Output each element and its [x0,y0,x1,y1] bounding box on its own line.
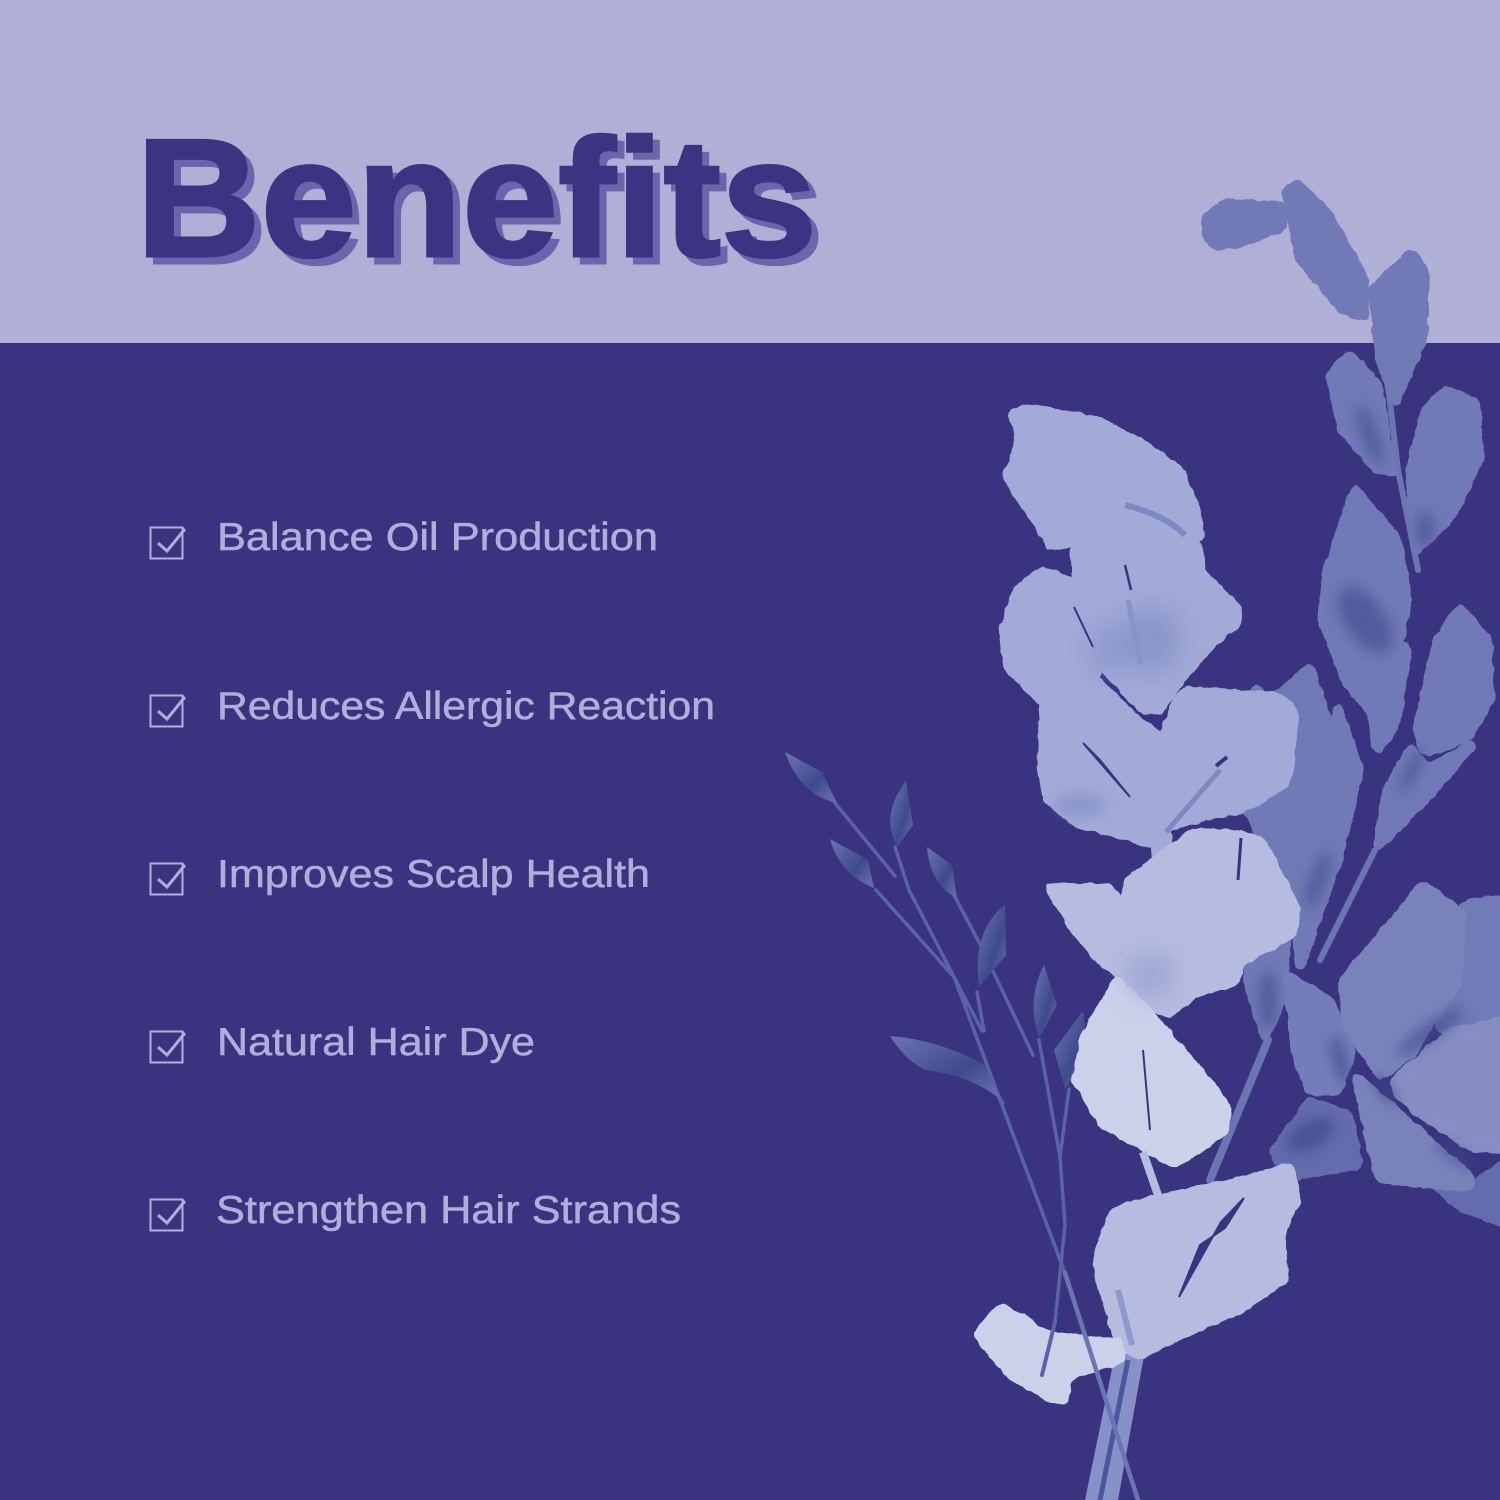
item: Improves Scalp Health: Improves Scalp Health [217,853,650,896]
right branch stems [1210,360,1418,1180]
stems crossing over the leaves [1042,1273,1138,1500]
white leaves [977,980,1228,1399]
right flower front petals [1342,885,1500,1188]
item: Balance Oil Production: Balance Oil Production [217,516,658,559]
item: Natural Hair Dye: Natural Hair Dye [217,1021,535,1064]
branch leaf shading [1259,404,1434,1030]
title: Benefits: Benefits [143,111,824,299]
botanical illustration [785,184,1500,1500]
main panel [0,343,1500,1500]
item: Strengthen Hair Strands: Strengthen Hair Strands [216,1189,681,1232]
title: Benefits: Benefits [136,104,817,292]
left thin stems [835,803,1069,1322]
right branch leaves [1206,184,1490,1038]
upper pale leaves [1003,408,1295,865]
main bouquet stems [1085,1340,1145,1500]
lower pale leaves [1049,832,1297,1356]
flower shading [1368,1002,1478,1174]
right flower back petals [1273,898,1500,1226]
benefits checklist [150,516,715,1232]
item: Reduces Allergic Reaction: Reduces Allergic Reaction [217,685,715,728]
header band [0,0,1500,343]
lower leaf shading and slits [1118,838,1244,1345]
buds [785,752,1088,1099]
upper leaf shading [1054,505,1227,832]
flower shadows [1280,1035,1353,1160]
